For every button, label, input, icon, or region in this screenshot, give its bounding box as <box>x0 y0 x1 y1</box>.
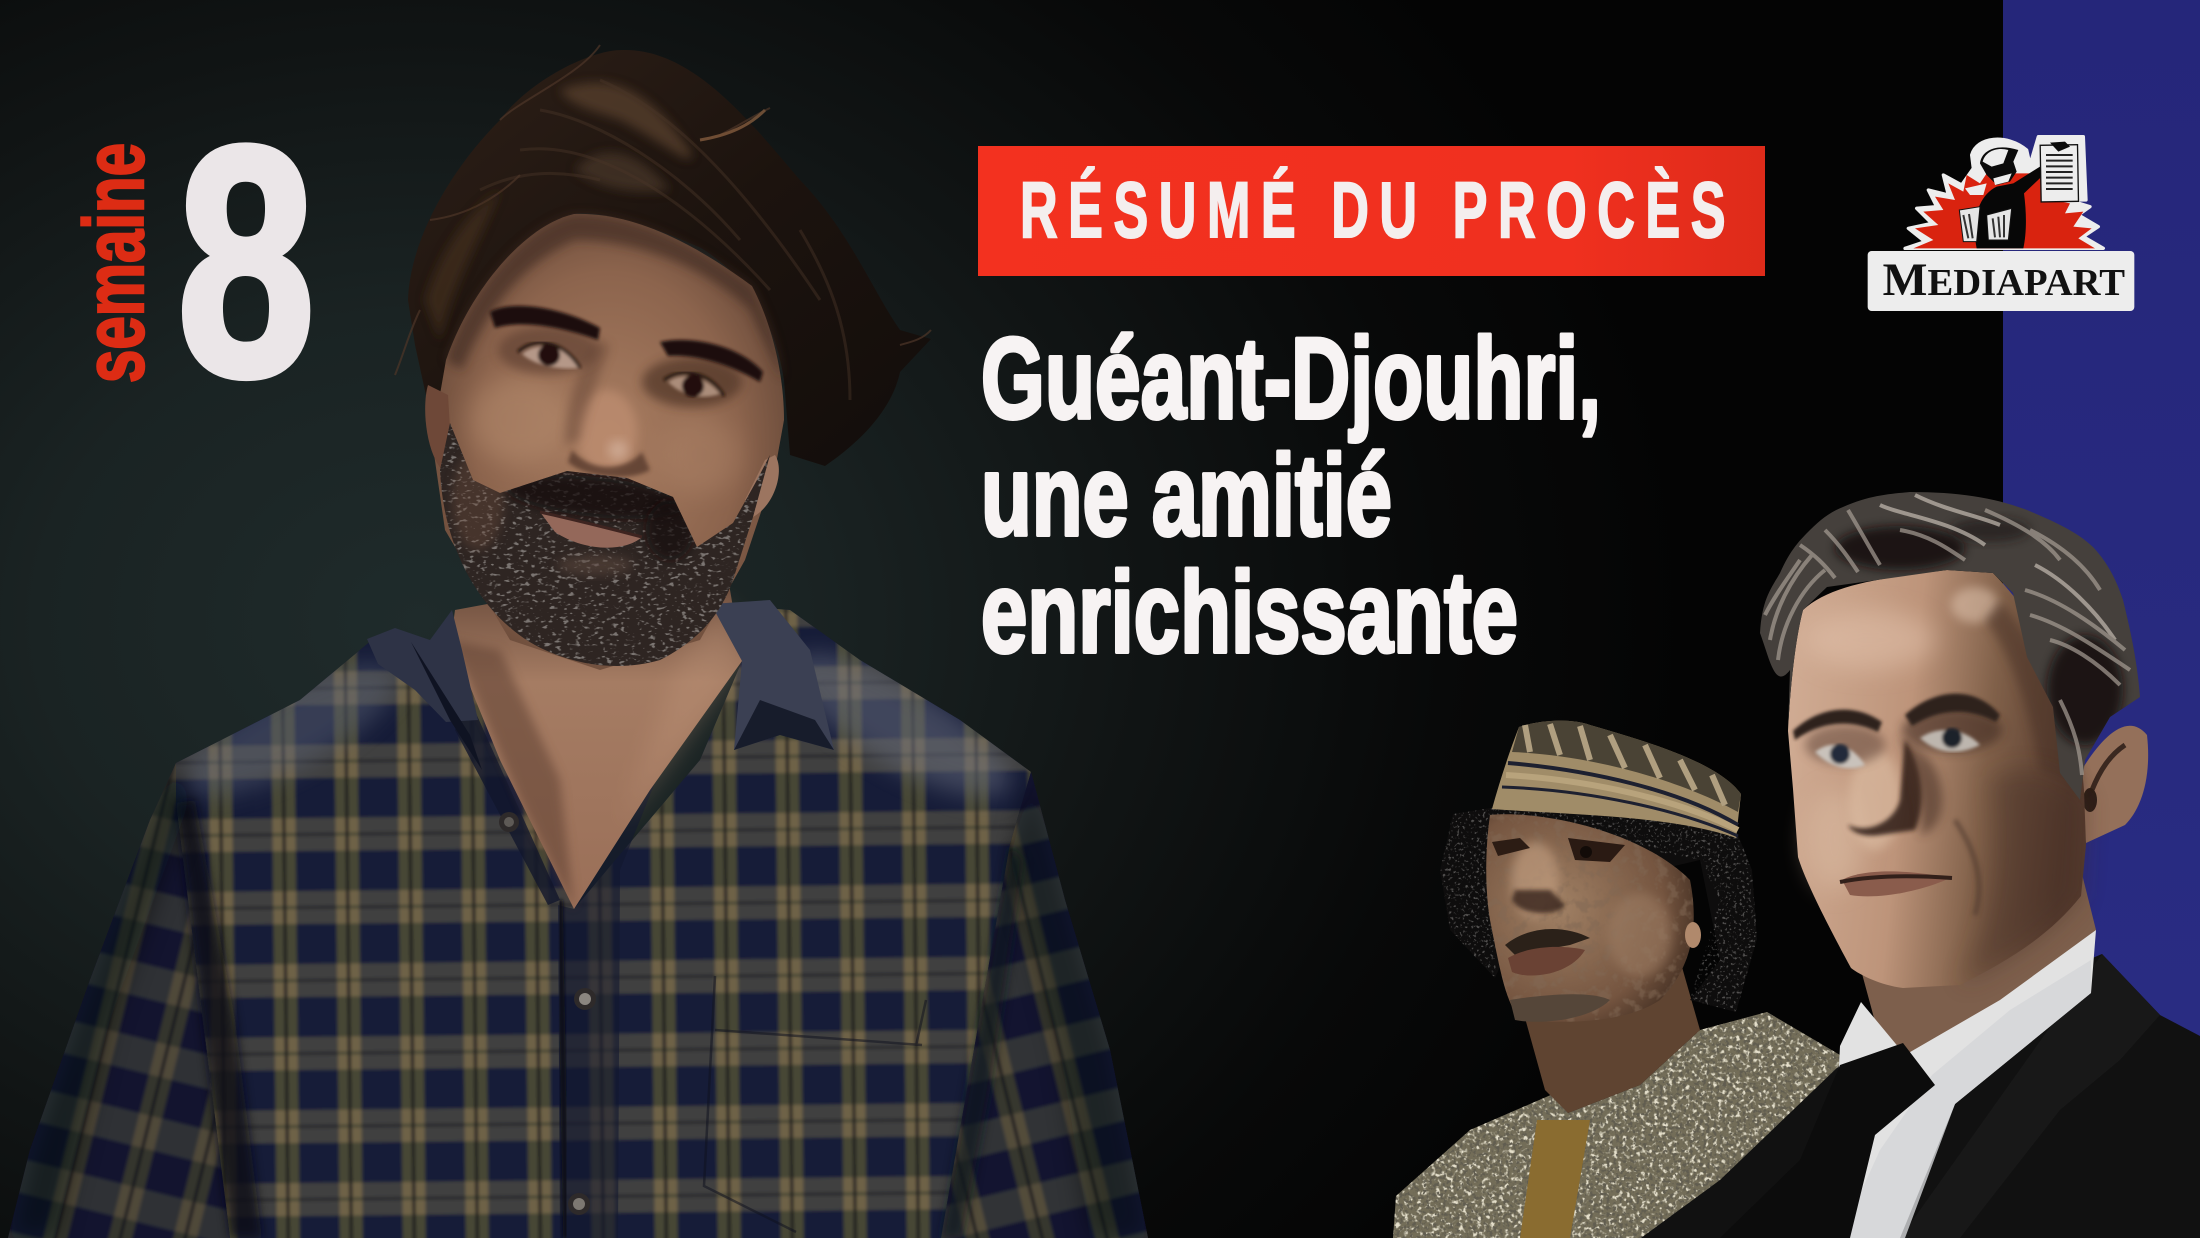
presenter beard <box>440 423 770 666</box>
left eye <box>1815 744 1865 768</box>
eye sockets <box>1805 725 1885 765</box>
nose light <box>577 390 637 474</box>
curly hair <box>1440 808 1757 1012</box>
forehead highlight <box>1951 587 1999 623</box>
week number 8: 8 <box>177 80 315 444</box>
neck <box>1520 960 1700 1113</box>
hair <box>1760 492 2140 800</box>
forehead shadow from hair <box>446 214 782 380</box>
eye sockets <box>498 326 598 374</box>
mouth <box>1842 871 1950 896</box>
figure <box>1965 147 2043 248</box>
jacket <box>1641 954 2200 1238</box>
presenter face <box>425 214 784 670</box>
right eye <box>1920 728 1980 752</box>
blue side panel <box>2003 0 2200 1238</box>
nose <box>1849 750 1901 850</box>
Mediapart logo <box>1868 137 2134 311</box>
button placket <box>558 770 660 1238</box>
nose side shadow <box>565 340 610 445</box>
headline <box>981 315 1601 677</box>
headline: Guéant-Djouhri, <box>981 315 1601 443</box>
shirt collar <box>1830 930 2096 1238</box>
collar <box>367 600 834 770</box>
robe <box>1390 1010 1845 1238</box>
lapel shading <box>1900 954 2160 1238</box>
left eye <box>518 343 580 368</box>
portrait: Gaddafi <box>1390 721 1845 1238</box>
raised newspaper <box>2040 142 2078 202</box>
nasolabial fold <box>1955 820 1979 915</box>
eyebrows <box>1793 694 2000 740</box>
mouth <box>1508 947 1585 976</box>
portrait: Sarkozy <box>1641 492 2200 1238</box>
logo wordmark: MEDIAPART <box>1883 254 2125 306</box>
logo sticker outline <box>1905 137 2103 248</box>
cheek light <box>470 375 570 465</box>
flyaway hairs <box>395 45 931 375</box>
headline: une amitié <box>981 432 1392 560</box>
dark hair core <box>1835 518 2123 745</box>
neck <box>1861 870 2096 1060</box>
lips <box>540 512 642 548</box>
left cheek light <box>1807 790 1863 890</box>
presenter neck <box>451 560 742 909</box>
headline: enrichissante <box>981 549 1518 677</box>
presenter portrait photo <box>0 45 1170 1238</box>
shoulders soft light <box>8 628 1148 1238</box>
hair streaks <box>1765 495 2130 775</box>
presenter shirt <box>0 590 1170 1238</box>
right ear <box>745 455 779 517</box>
nose <box>1512 890 1565 913</box>
cheek shadow <box>1960 770 2086 985</box>
semaine label: semaine <box>67 143 161 383</box>
black tie <box>1720 1043 1935 1238</box>
ear <box>1685 922 1701 948</box>
ear <box>2076 726 2148 843</box>
red banner <box>978 146 1765 276</box>
chin beard <box>1510 994 1610 1022</box>
banner text: RÉSUMÉ DU PROCÈS <box>1020 165 1736 254</box>
red starburst <box>1913 173 2095 248</box>
carried newspapers <box>1959 207 2012 242</box>
patterned cap <box>1492 721 1741 838</box>
logo label <box>1868 251 2134 311</box>
shirt buttons <box>499 812 596 1215</box>
right eye <box>664 373 724 397</box>
moustache <box>1505 929 1590 955</box>
left ear <box>425 385 452 470</box>
hair strands <box>480 80 850 400</box>
figure head and cap <box>1980 147 2018 185</box>
skin tone showing through left beard <box>452 450 504 550</box>
eyebrows <box>490 306 763 382</box>
shirt pocket <box>704 976 926 1232</box>
dark seams and gap under arm <box>176 800 262 1238</box>
temple shadow <box>1985 600 2084 790</box>
face <box>1485 810 1701 1025</box>
eyes and brows <box>1492 838 1530 856</box>
hair highlights <box>425 82 692 340</box>
face <box>1788 570 2086 988</box>
presenter hair behind face <box>408 50 931 466</box>
